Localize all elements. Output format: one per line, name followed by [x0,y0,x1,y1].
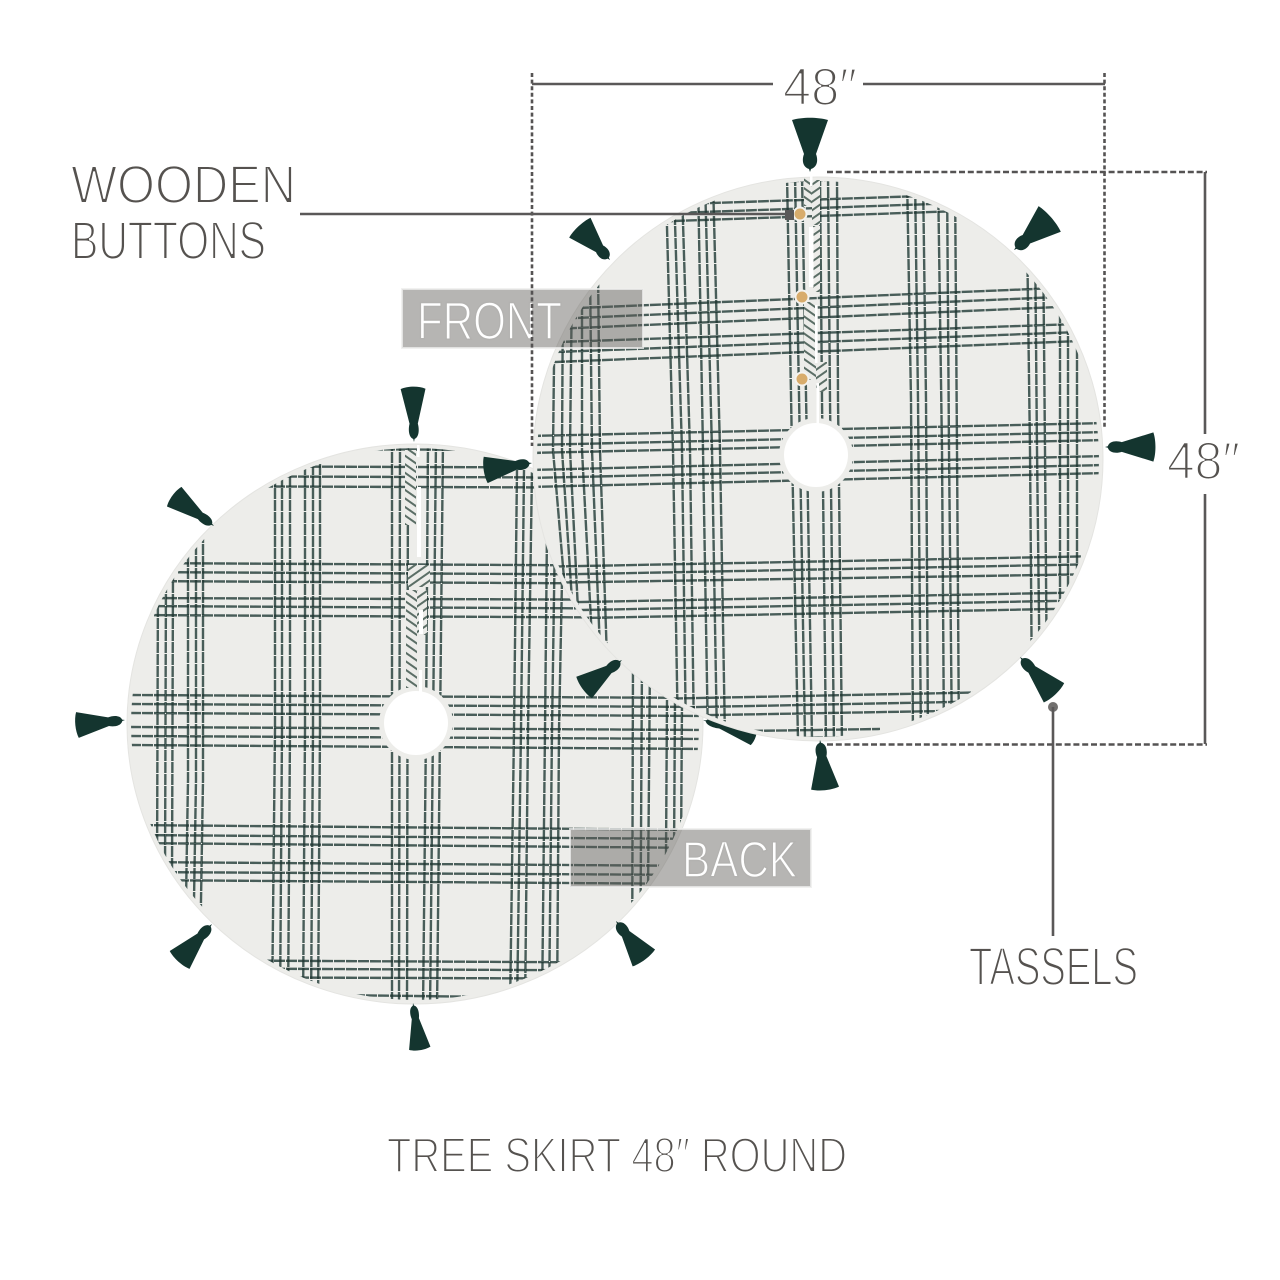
label: BACK: BACK [682,831,797,888]
button: bottom [796,372,808,386]
callout: wooden buttons [71,155,794,271]
front skirt plaid [530,175,1105,745]
tassel: bottom [402,1001,431,1052]
callout: tassels: TASSELS [969,937,1138,997]
dimension: height 48 inches: 48″ [1167,432,1240,491]
back skirt plaid placket with slit [405,445,430,694]
front skirt center hole [779,418,853,492]
callout: tassels [969,702,1138,997]
tassel: lower left [575,649,630,699]
tassel: right [1105,432,1155,462]
tassel: top [792,118,828,172]
callout: wooden buttons: WOODEN [71,155,296,215]
tassel: upper left [165,486,221,536]
wooden buttons [794,208,808,386]
dimension: height 48 inches [827,172,1240,744]
back skirt fabric [127,444,703,1004]
back skirt plaid [130,440,710,1010]
tassel: upper left [568,216,621,270]
back skirt tassels [74,386,656,1052]
front skirt fabric [533,177,1103,741]
dimension: width 48 inches [532,58,1105,446]
tassel: lower right [1010,647,1066,704]
button: middle [796,290,808,304]
tassel: upper right [1003,205,1062,263]
tassel: lower right [605,913,656,968]
panel: front view tree skirt [482,118,1155,792]
dimension: width 48 inches: 48″ [783,58,857,117]
tassel: lower left [168,915,222,970]
back skirt right tassel [700,710,759,746]
tassel: left [74,707,126,738]
callout: wooden buttons: BUTTONS [71,211,266,271]
title: tree skirt 48 inch round: TREE SKIRT 48″ ROUND [387,1129,847,1183]
front skirt plaid placket with slit [804,172,827,428]
button: top [794,208,806,220]
tassel: left [482,450,534,483]
tassel: bottom [806,739,839,792]
back skirt center hole [379,686,453,760]
front skirt tassels [482,118,1155,792]
tassel: top [401,386,426,442]
panel: back view tree skirt [74,386,759,1052]
label: FRONT: FRONT [417,292,562,351]
label: BACK [570,829,811,888]
